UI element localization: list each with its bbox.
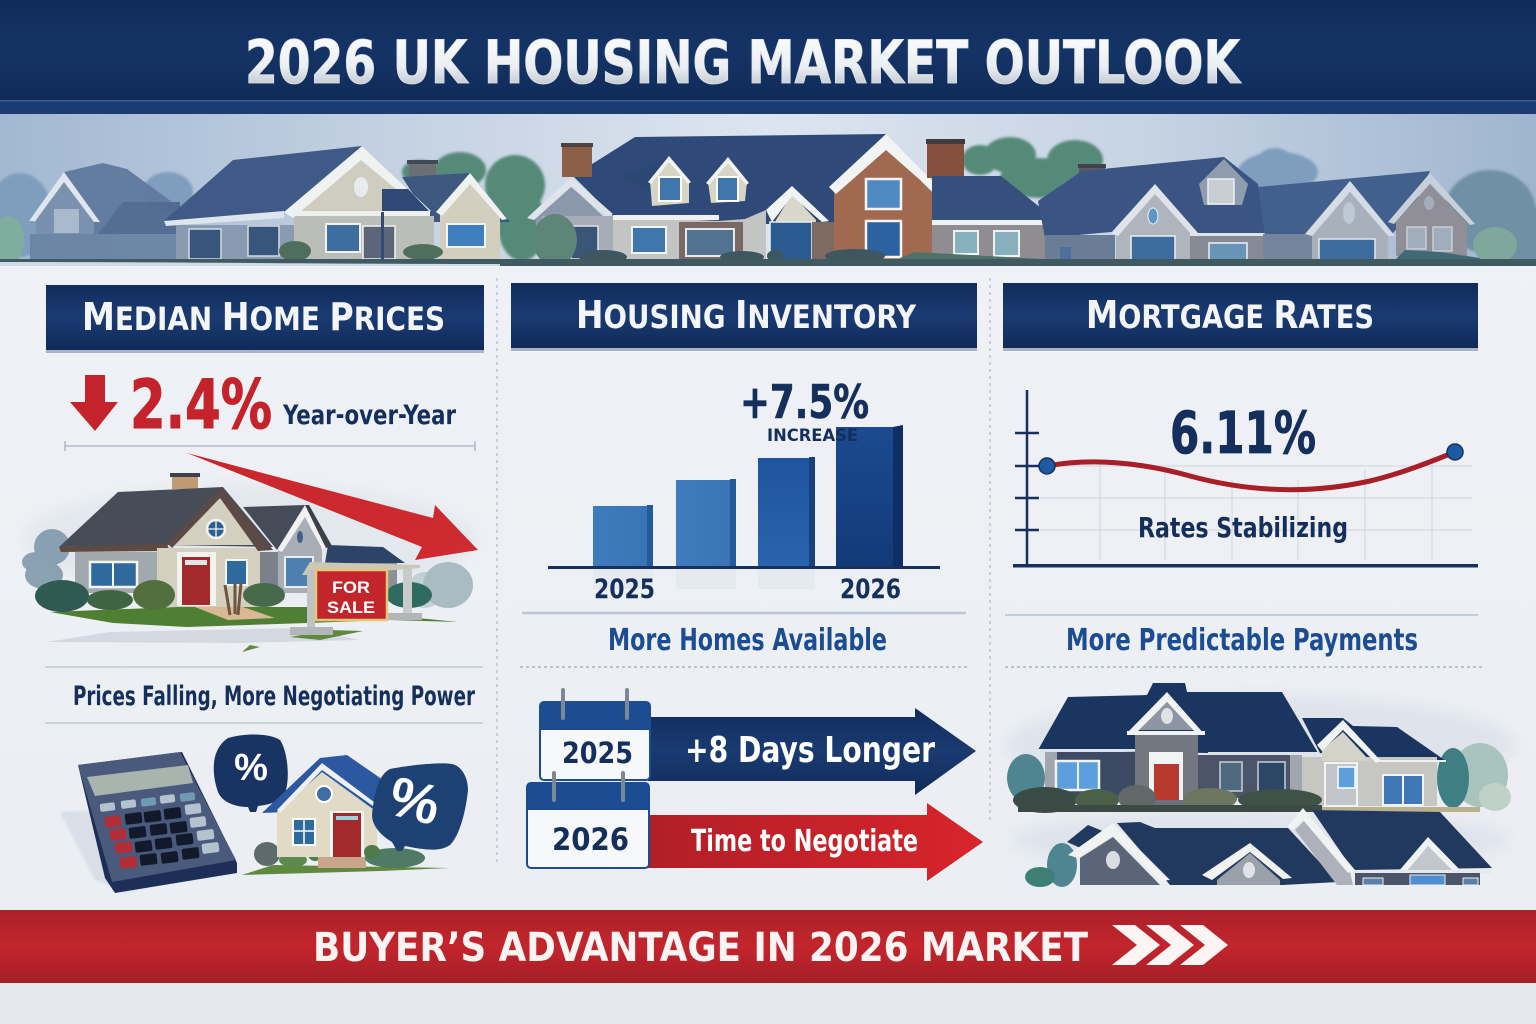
icon: calculator xyxy=(60,752,237,893)
label 2026: 2026 xyxy=(840,574,901,605)
heading: median home prices: MEDIAN HOME PRICES xyxy=(82,295,445,339)
ground strip xyxy=(0,259,1536,266)
label: year-over-year: Year-over-Year xyxy=(282,400,456,431)
centre house group xyxy=(527,134,1060,266)
stat: +7.5% increase: +7.5% xyxy=(740,375,869,429)
heading: mortgage rates: MORTGAGE RATES xyxy=(1086,293,1374,337)
left house group xyxy=(164,146,510,262)
heading: mortgage rates xyxy=(1003,283,1478,351)
icon: calendar 2026 xyxy=(527,773,649,868)
hazy and green trees xyxy=(0,137,1536,265)
separators xyxy=(497,278,990,862)
icon: chevrons xyxy=(1112,925,1228,965)
panel: median home prices xyxy=(22,285,484,893)
panel: mortgage rates xyxy=(1003,283,1515,887)
icon: percent bubble large xyxy=(372,763,468,851)
lower house xyxy=(1025,808,1492,887)
banner: buyer's advantage: BUYER’S ADVANTAGE IN 2026 MARKET xyxy=(313,925,1088,971)
arrow: time to negotiate xyxy=(645,803,983,881)
bushes xyxy=(35,580,432,612)
hero: row of houses xyxy=(0,114,1536,266)
icon: down arrow xyxy=(70,375,118,431)
icon: percent bubble large: % xyxy=(383,764,447,837)
icon: calendar 2026: 2026 xyxy=(552,822,629,858)
icon: calendar 2025 xyxy=(540,690,650,780)
far left house xyxy=(29,163,190,261)
heading: median home prices xyxy=(46,285,484,353)
caption: more predictable payments: More Predictable Payments xyxy=(1066,623,1418,658)
stat: 2.4%: 2.4% xyxy=(130,366,272,445)
stat: +7.5% increase xyxy=(740,375,869,446)
arrow: +8 days longer xyxy=(648,708,976,795)
arrow: time to negotiate: Time to Negotiate xyxy=(691,824,918,859)
icon: red falling arrow xyxy=(187,453,478,560)
lawn xyxy=(50,607,458,627)
line chart xyxy=(1013,390,1478,568)
icon: percent bubble small: % xyxy=(234,747,268,789)
label: rates stabilizing: Rates Stabilizing xyxy=(1138,511,1348,544)
stat: +7.5% increase: INCREASE xyxy=(767,426,858,446)
label 2025: 2025 xyxy=(594,574,655,605)
caption: prices falling: Prices Falling, More Negotiating Power xyxy=(73,681,475,712)
for sale sign: SALE xyxy=(327,598,375,617)
bar chart xyxy=(548,425,940,605)
right house group xyxy=(1038,157,1517,263)
upper house xyxy=(1013,683,1480,813)
heading: housing inventory xyxy=(511,283,977,351)
title: 2026 UK HOUSING MARKET OUTLOOK xyxy=(245,28,1242,98)
hazy trees xyxy=(22,529,473,608)
arrow: +8 days longer: +8 Days Longer xyxy=(685,730,935,771)
illustration: houses xyxy=(1005,683,1515,887)
trees xyxy=(1007,743,1511,811)
panel: housing inventory xyxy=(511,283,983,881)
icon: small house xyxy=(242,755,450,875)
house xyxy=(172,473,198,489)
caption: more homes available: More Homes Available xyxy=(608,623,887,658)
rule xyxy=(65,441,475,451)
icon: calendar 2025: 2025 xyxy=(562,736,633,770)
divider and caption xyxy=(45,667,483,723)
for sale sign xyxy=(290,562,422,635)
title banner xyxy=(0,0,1536,114)
banner: buyer's advantage xyxy=(0,910,1536,1024)
heading: housing inventory: HOUSING INVENTORY xyxy=(576,293,917,337)
illustration: house for sale xyxy=(22,473,475,652)
for sale sign: FOR xyxy=(332,578,370,597)
stat: 6.11%: 6.11% xyxy=(1170,399,1316,467)
icon: percent bubble small xyxy=(214,734,288,812)
